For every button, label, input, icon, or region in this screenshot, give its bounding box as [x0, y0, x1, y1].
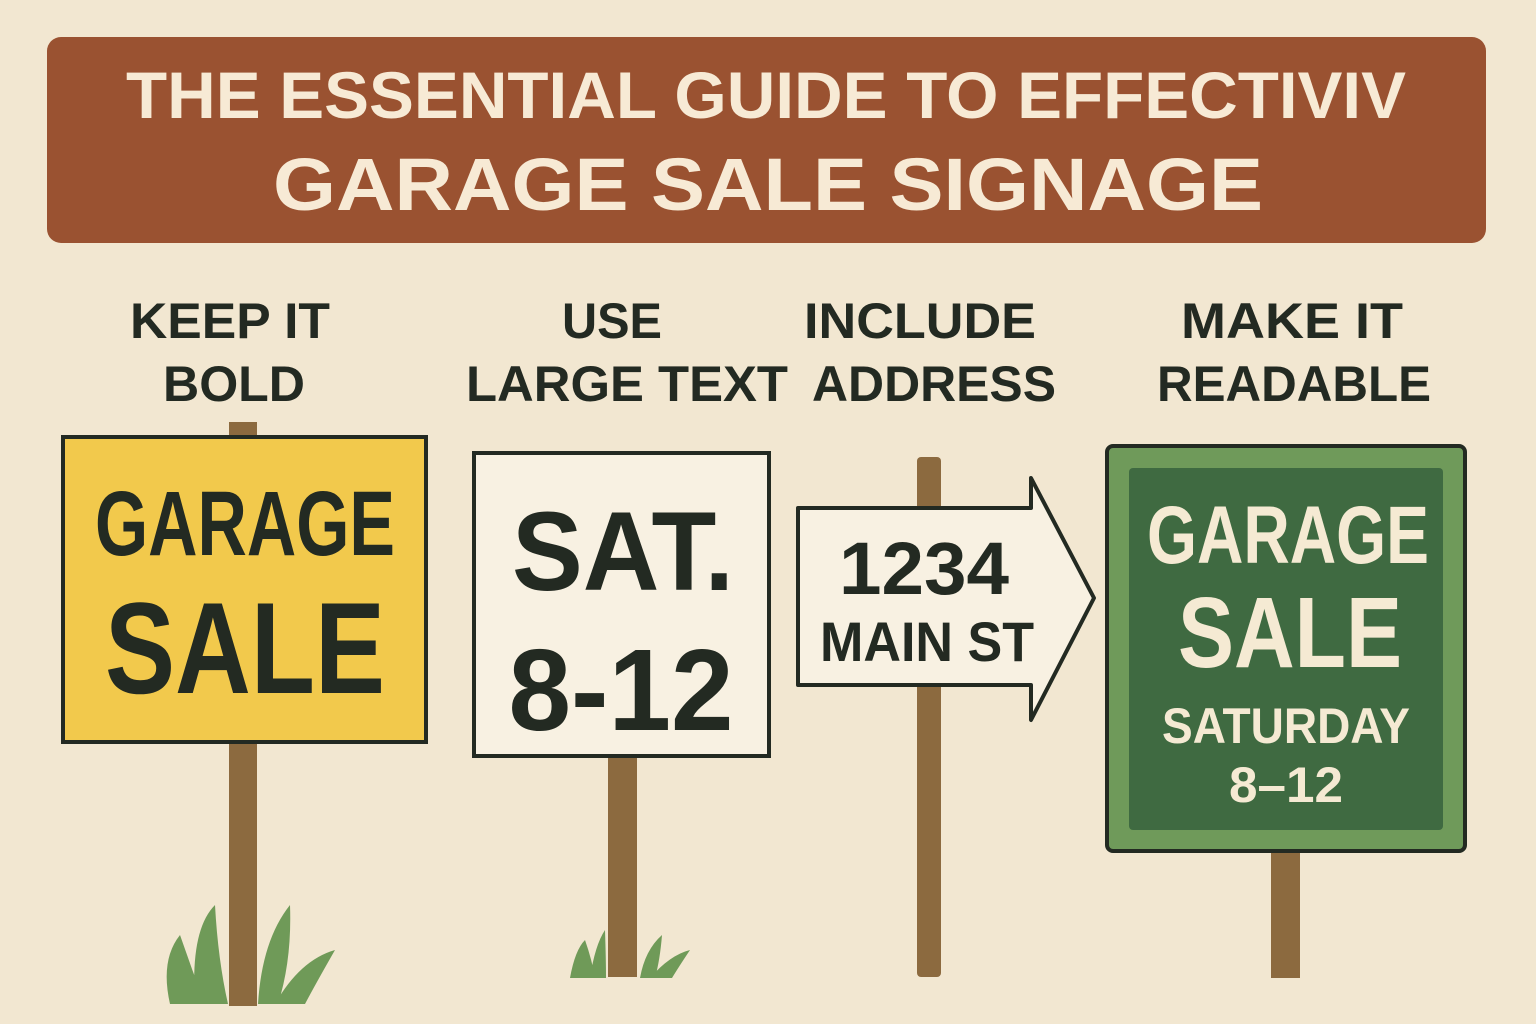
heading: use large text: LARGE TEXT — [466, 356, 788, 412]
sign 3: arrow address — [798, 457, 1094, 977]
heading: include address: ADDRESS — [812, 356, 1056, 412]
heading: make it readable: READABLE — [1157, 356, 1431, 412]
heading: include address: INCLUDE — [804, 293, 1036, 349]
title banner: GARAGE SALE SIGNAGE — [273, 143, 1263, 226]
heading: include address — [804, 293, 1056, 412]
heading: make it readable: MAKE IT — [1181, 293, 1403, 349]
sign 1: yellow garage sale: SALE — [105, 575, 385, 721]
sign 4: green readable: SALE — [1178, 577, 1402, 689]
heading: use large text: USE — [562, 293, 662, 349]
sign 2: date/time — [474, 453, 769, 978]
sign 1: yellow garage sale: GARAGE — [95, 473, 395, 575]
sign 3: arrow address: 1234 — [839, 527, 1009, 610]
heading: keep it bold: BOLD — [163, 356, 305, 412]
heading: make it readable — [1157, 293, 1431, 412]
sign 4: green readable — [1107, 446, 1465, 978]
sign 2: date/time: SAT. — [512, 489, 734, 614]
heading: use large text — [466, 293, 788, 412]
heading: keep it bold — [130, 293, 330, 412]
sign 4: green readable: 8–12 — [1229, 757, 1343, 813]
sign 4: green readable: GARAGE — [1147, 490, 1429, 581]
title banner: THE ESSENTIAL GUIDE TO EFFECTIVIV — [126, 58, 1406, 132]
sign 1: yellow garage sale — [63, 422, 426, 1006]
heading: keep it bold: KEEP IT — [130, 293, 330, 349]
sign 2: date/time: 8-12 — [508, 625, 734, 755]
sign 4: green readable: SATURDAY — [1162, 698, 1410, 754]
title banner — [47, 37, 1486, 243]
sign 3: arrow address: MAIN ST — [820, 610, 1034, 673]
